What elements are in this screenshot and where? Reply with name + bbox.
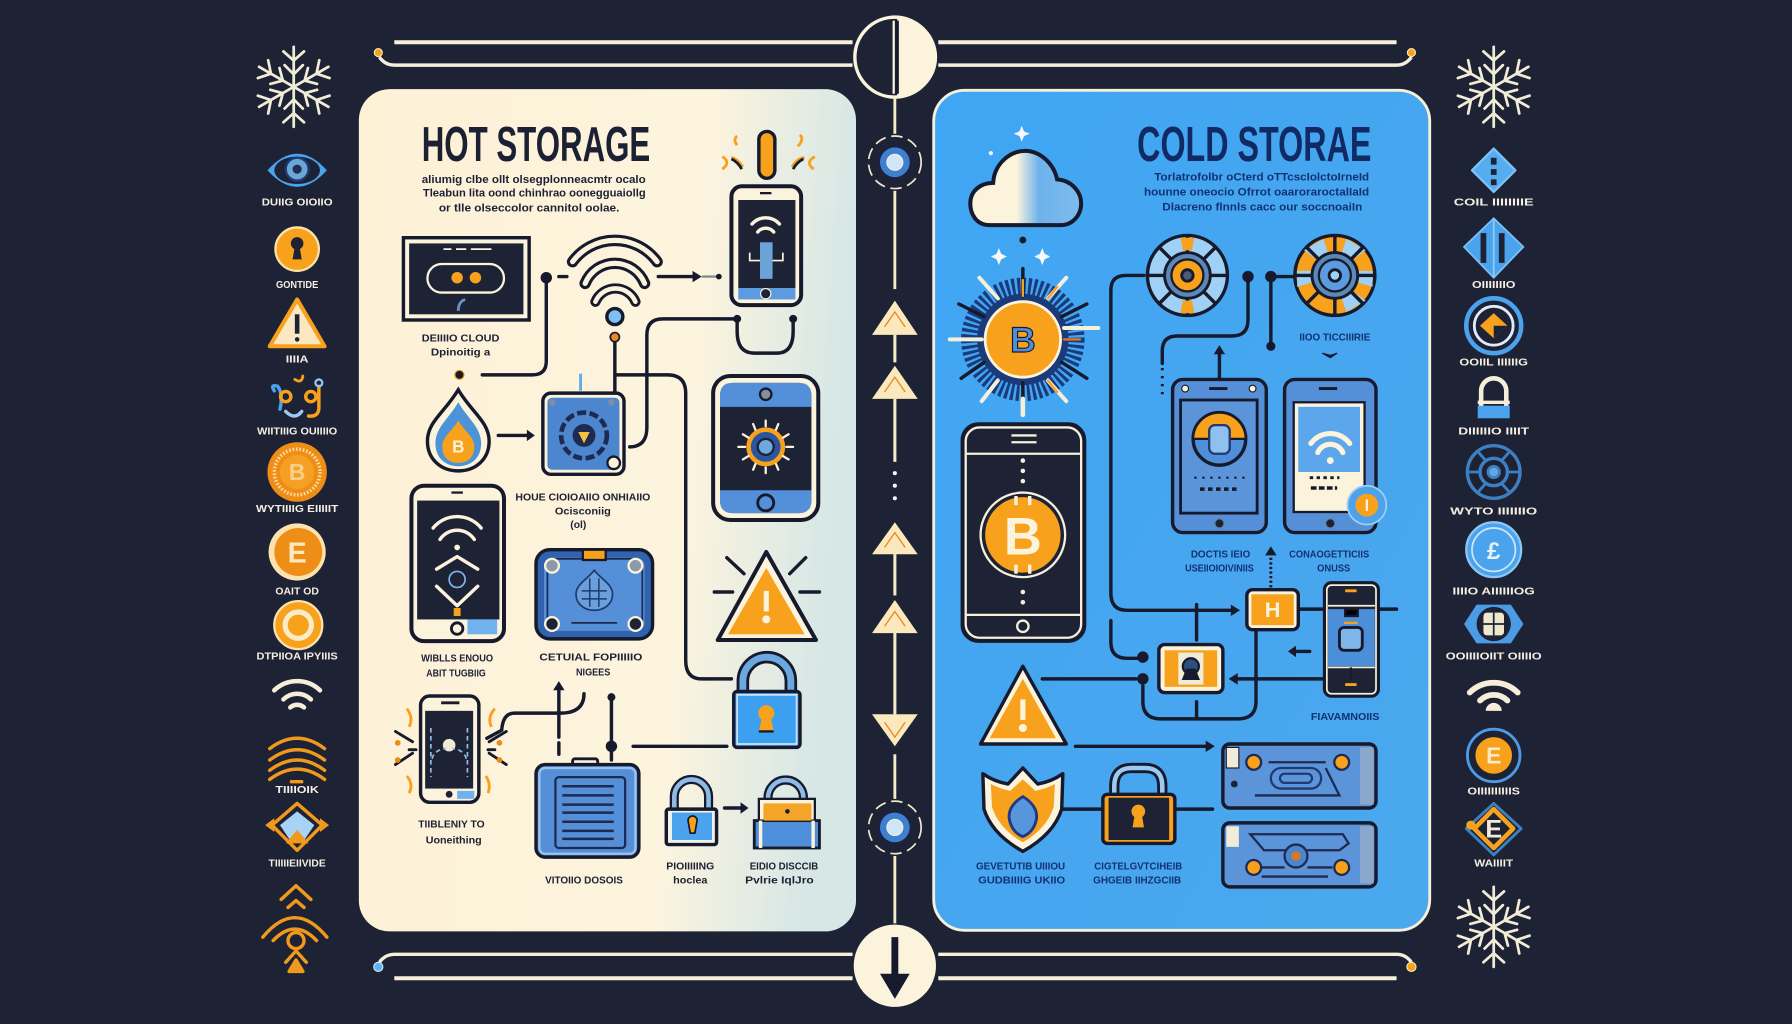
labels: shield and padlock: GUDBIIIIG UKIIO [978,875,1065,886]
icon: blue wheel [1467,446,1520,498]
icon: eye [267,154,327,187]
icon: wallet badge [1466,803,1521,855]
icon: large padlock [734,657,800,747]
icon: orange h box [1247,590,1298,630]
label: wallet badge: WAIIIIT [1474,858,1513,869]
right icon column [1446,47,1542,967]
label: small padlock: hoclea [673,875,708,886]
icon: swirl face [273,376,322,416]
icon: gear wheel left [1147,235,1227,315]
label: euro coin: OIIIIIIIIIIS [1467,786,1521,797]
label: swirl face: WIITIIIG OUIIIIO [257,426,338,437]
intro text: hot: aliumig clbe ollt olsegplonneacmtr ocalo [422,174,646,186]
icon: bitcoin burst: B [1010,320,1036,360]
label: phone with sparks: Uoneithing [426,835,482,846]
label: gear module [515,493,650,531]
label: hardware device: CETUIAL FOPIIIIIO [539,653,642,664]
icon: gear module [543,393,624,474]
icon: diamond badge [265,803,329,850]
icon: wifi signal [573,240,657,342]
icon: cloud monitor [403,238,529,320]
icon: warning small [270,299,325,346]
label: coin e: OAIT OD [275,586,319,597]
icon: tablet with sun [713,376,818,520]
label: small padlock [666,862,714,886]
icon: hexagon [1464,605,1523,643]
icon: snowflake right top [1454,47,1533,127]
label: cloud monitor [422,334,499,358]
title: cold storage: COLD STORAE [1137,118,1371,172]
label: open padlock bag: EIDIO DISCCIB [750,862,818,873]
labels: shield and padlock: GHGEIB IIHZGCIIB [1093,875,1181,886]
connector lines: cold [1042,271,1397,809]
icon: storage device two [1223,823,1376,887]
intro text: cold: hounne oneocio Ofrrot oaaroraroctalIaId [1144,186,1369,198]
top ornament bar [374,17,1415,97]
label: wheels: IIOO TICCIIIRIE [1299,333,1370,344]
icon: wifi cream [274,681,320,707]
labels: shield and padlock: GEVETUTIB UIIIOU [976,862,1065,873]
label: diamond badge: TIIIIIEIIVIDE [269,858,326,869]
left icon column [254,47,338,971]
icon: phone with lock signal [411,486,504,641]
label: phone with sparks [418,819,485,846]
panel: hot storage [359,89,856,931]
intro text: cold [1144,172,1369,213]
icon: signal arrows [263,886,327,971]
labels: shield and padlock [976,862,1182,886]
sparkles: cold [989,126,1050,265]
label: warning small: IIIIA [286,354,309,365]
label: cloud monitor: Dpinoitig a [431,347,491,358]
label: blue split diamond: OIIIIIIIO [1472,280,1516,291]
icon: euro coin: E [1486,742,1501,768]
label: blue coin: IIIIO AIIIIIIOG [1453,586,1535,597]
icon: cold phone with coin [1173,379,1266,533]
intro text: cold: Torlatrofolbr oCterd oTTcscIolctoIrneId [1154,172,1369,184]
label: cream lock: DIIIIIIO IIIIT [1458,426,1529,437]
node: upper center [866,134,923,191]
intro text: hot: Tleabun lita oond chinhrao oonegguaiollg [423,188,646,200]
label: hardware device [539,653,642,678]
icon: wifi cream right [1470,683,1518,701]
label: eye: DUIIG OIOIIO [262,198,333,209]
icon: shield [983,768,1063,851]
icon: document vault [536,759,639,857]
bottom ornament bar [374,925,1416,1007]
icon: hardware device [536,550,653,639]
label: wifi orange: TIIIIOIK [275,785,319,796]
icon: bitcoin burst [950,269,1098,415]
label: keyhole coin: GONTIDE [276,280,319,291]
icon: phone with bitcoin [962,424,1085,641]
icon: cold padlock [1103,768,1175,843]
icon: coin large: B [289,459,305,485]
title: hot storage: HOT STORAGE [422,118,650,172]
icon: coin e: E [288,537,307,569]
icon: phone with sparks [395,696,506,802]
label: hexagon: OOIIIIOIIT OIIIIO [1446,651,1542,662]
icon: blue diamond [1472,149,1515,192]
icon: gear wheel right [1295,235,1375,315]
label: gear module: HOUE CIOIOAIIO ONHIAIIO [515,493,650,504]
intro text: hot [422,174,646,214]
label: phone with sparks: TIIBLENIY TO [418,819,485,830]
label: hardware device: NIGEES [576,667,610,678]
icon: tall phone [1325,583,1378,696]
icon: ring coin [274,601,322,649]
icon: coin large [267,442,327,502]
label: gear module: (ol) [570,520,586,531]
icon: alert pill and sparks [722,131,815,178]
icon: wifi base [1486,703,1502,711]
labels: cold phones: CONAOGETTICIIS [1289,550,1369,561]
icon: snowflake right bottom [1454,887,1533,967]
label: ring coin: DTPIIOA IPYIIIS [257,651,338,662]
icon: warning triangle [714,552,819,640]
connector lines: hot [455,271,797,814]
icon: flame drop bitcoin: B [452,437,464,457]
icon: orange lock box [1159,645,1223,693]
label: blue diamond: COIL IIIIIIIIE [1454,198,1534,209]
label: small padlock: PIOIIIIING [666,862,714,873]
icon: blue coin [1466,522,1521,577]
icon: snowflake left top [254,47,333,127]
icon: cold warning triangle [981,666,1066,744]
labels: cold phones: DOCTIS IEIO [1191,550,1250,561]
label: wallet phone: WIBLLS ENOUO [421,654,493,665]
center divider with arrows [872,97,918,923]
intro text: hot: or tlle olseccolor cannitol oolae. [439,202,619,214]
icon: gem circle [1466,298,1521,353]
node: lower center [866,799,923,856]
icon: wallet badge: E [1485,816,1502,844]
labels: cold phones: USEIIOIOIVINIIS [1185,563,1254,574]
label: cloud monitor: DEIIIIO CLOUD [422,334,499,345]
icon: cloud [970,151,1081,243]
labels: shield and padlock: CIGTELGVTCIHEIB [1094,862,1182,873]
label: coin large: WYTIIIIG EIIIIIT [256,504,338,515]
label: blue wheel: WYTO IIIIIIIO [1450,506,1538,517]
label: document vault: VITOIIO DOSOIS [545,875,623,886]
icon: storage device one [1223,744,1376,808]
icon: orange h box: H [1265,597,1280,622]
label: gem circle: OOIIL IIIIIIG [1459,358,1528,369]
icon: phone with wifi [731,186,801,305]
icon: phone with bitcoin: B [1004,507,1042,566]
icon: cream lock [1478,378,1510,418]
icon: keyhole coin [275,227,319,271]
icon: coin e [269,523,326,581]
label: tall phone: FIAVAMNOIIS [1311,712,1380,723]
icon: blue split diamond [1464,218,1523,278]
icon: small padlock [666,779,717,845]
label: open padlock bag [745,862,818,886]
labels: cold phones [1185,550,1369,574]
labels: cold phones: ONUSS [1317,563,1350,574]
intro text: cold: Dlacreno flnnls cacc our soccnoaiIn [1162,201,1362,213]
label: gear module: Ocisconiig [555,506,611,517]
label: wallet phone: ABIT TUGBIIG [426,669,486,680]
icon: wifi orange [270,738,325,782]
label: open padlock bag: Pvlrie IqlJro [745,875,814,886]
icon: flame drop bitcoin [427,390,489,471]
icon: euro coin [1467,729,1520,782]
label: wallet phone [421,654,493,680]
icon: cold phone with wifi [1285,379,1386,533]
icon: blue coin: £ [1487,538,1501,565]
icon: open padlock bag [754,780,819,848]
panel: cold storage [934,90,1430,930]
